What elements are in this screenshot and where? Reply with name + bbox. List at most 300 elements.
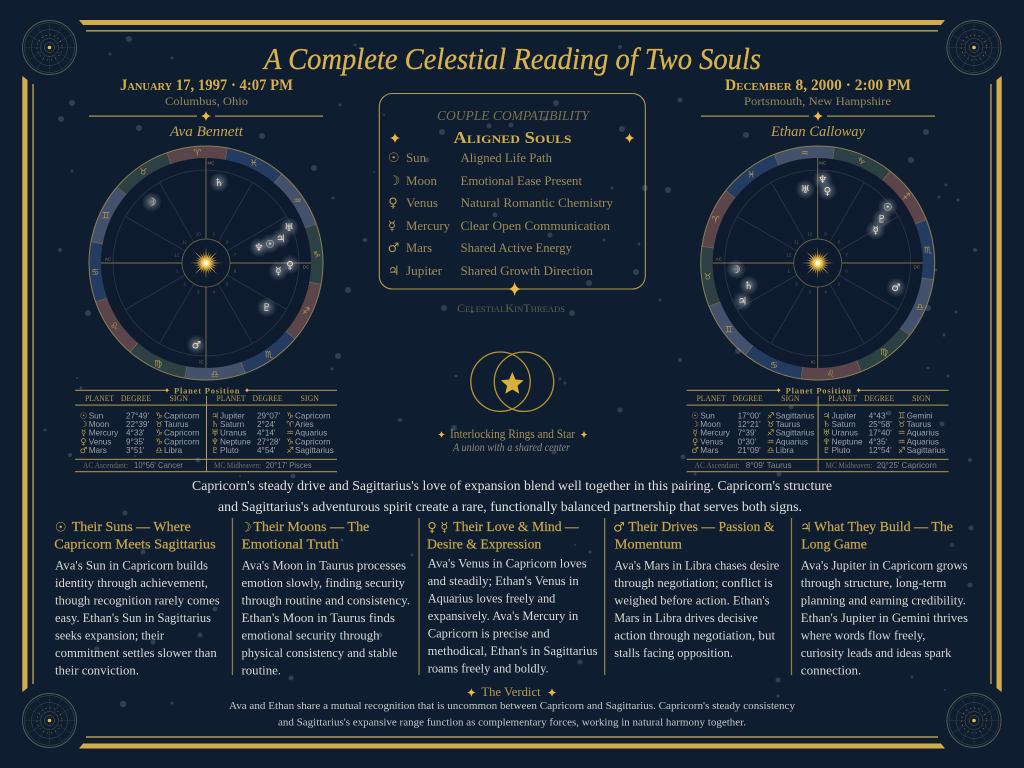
planet: Mars [886,277,906,297]
column: their suns: seeks expansion; their [55,628,165,642]
natal chart: Ava Bennett: ♌︎ [110,322,119,332]
compatibility rows: Moon [406,173,437,188]
column: their moons [240,520,410,677]
table: Ethan planet positions: Venus [700,437,723,446]
natal chart: Ava Bennett: ♋︎ [91,268,99,278]
column: love and mind: ☿ [440,520,448,536]
natal chart: Ethan Calloway: ♈︎ [712,215,721,225]
table: Ethan planet positions: SIGN [781,393,800,403]
natal chart: Ethan Calloway: IC [811,360,816,364]
column: their suns: though recognition rarely comes [55,593,220,607]
natal chart: Ethan Calloway: 4 [824,290,827,294]
table: Ethan planet positions: ♄ [823,420,830,430]
table: Ava planet positions: Capricorn [295,437,331,446]
rings caption [438,427,588,454]
column: what they build: where words flow freely, [801,628,925,642]
column: love and mind: Capricorn is precise and [428,626,550,640]
table: Ava planet positions: 4°54' [257,446,276,455]
verdict: The Verdict [481,685,541,699]
natal chart: Ava Bennett: 6 [234,268,237,273]
natal chart: Ethan Calloway: 12 [786,253,792,258]
table: Ethan planet positions: Mercury [700,429,731,438]
table: Ava planet positions: Neptune [220,437,251,446]
table: Ava planet positions [75,386,337,472]
table: Ethan planet positions: ☿ [692,429,698,439]
planet: Moon [726,259,746,279]
table: Ava planet positions: ♎︎ [155,446,163,456]
table: Ava planet positions: ♉︎ [155,420,163,430]
table: Ava planet positions: Aries [295,420,314,429]
column: their suns: easy. Ethan's Sun in Sagittarius [55,611,211,625]
natal chart: Ava Bennett: 2 [184,282,187,287]
planet: Saturn [209,172,229,192]
natal chart: Ethan Calloway: 6 [845,268,848,273]
table: Ethan planet positions: Gemini [907,411,933,420]
natal chart: Ethan Calloway: ♍︎ [880,348,888,358]
table: Ava planet positions: Capricorn [164,437,200,446]
natal chart: Ava Bennett: 3 [197,290,200,294]
column: their suns: their conviction. [55,663,139,677]
table: Ava planet positions: Jupiter [220,411,245,420]
table: Ava planet positions: AC Ascendant: [83,461,128,470]
table: Ethan planet positions: Uranus [832,429,858,438]
compatibility rows: Venus [406,195,438,210]
table: Ethan planet positions [687,386,949,472]
table: Ava planet positions: Sagittarius [295,446,334,455]
compatibility rows: Natural Romantic Chemistry [460,195,613,210]
table: Ava planet positions: 20°17' Pisces [266,460,312,470]
natal chart: Ethan Calloway: AC [716,256,723,262]
table: Ethan planet positions: ♐︎ [898,446,905,456]
table: Ethan planet positions: Taurus [776,420,800,429]
table: Ava planet positions: Planet Position [174,386,240,396]
column: love and mind: Desire & Expression [427,538,541,552]
planet: Mars [186,335,206,355]
table: Ethan planet positions: ♐︎ [767,429,774,439]
table: Ethan planet positions: Aquarius [776,437,808,446]
table: Ethan planet positions: ♇ [823,446,830,456]
table: Ethan planet positions: AC Ascendant: [695,461,740,470]
table: Ava planet positions: Saturn [220,420,245,429]
compatibility rows: ☽ [389,174,400,189]
table: Ava planet positions: ☿ [81,429,86,439]
table: Ava planet positions: Aquarius [295,429,327,438]
column: their suns: Their Suns — Where [72,520,191,535]
table: Ethan planet positions: SIGN [912,393,931,403]
column: their moons: emotion slowly, finding security [242,576,406,590]
natal chart: Ethan Calloway: ♐︎ [903,193,911,203]
column: love and mind: Ava's Venus in Capricorn loves [428,556,587,570]
column: their moons: Emotional Truth [242,538,339,552]
column: their moons: ☽ [240,520,252,536]
natal chart: Ethan Calloway: ♎︎ [916,303,924,313]
planet: Venus: ♀ [286,259,294,271]
planet: Uranus: ♅ [801,184,810,196]
natal chart: Ethan Calloway: 9 [824,232,827,236]
column: their suns [54,520,220,677]
natal chart: Ava Bennett: ♒︎ [293,196,302,206]
table: Ethan planet positions: ♀ [692,437,698,447]
compatibility rows [388,150,613,279]
table: Ava planet positions: Mercury [89,429,119,438]
planet: Saturn [739,275,759,295]
column: their suns: commitment settles slower than [55,646,217,660]
natal chart: Ethan Calloway: ♊︎ [725,326,733,336]
table: Ava planet positions: 29°07' [257,411,280,420]
natal chart: Ethan Calloway: 7 [845,253,848,258]
table: Ethan planet positions: ♒︎ [898,429,905,439]
table: Ethan planet positions: Aquarius [907,437,939,446]
column: their drives: ♂ [613,520,625,536]
column: love and mind: and steadily; Ethan's Venus in [428,574,579,588]
corner medallion: top left [22,20,76,74]
table: Ava planet positions: 22°39' [126,420,149,429]
table: Ava planet positions: SIGN [170,393,188,403]
table: Ava planet positions: ♑︎ [286,411,294,421]
planet: Jupiter [732,291,752,311]
table: Ava planet positions: DEGREE [121,393,151,403]
left person header: Columbus, Ohio [165,94,248,108]
natal chart: Ava Bennett: ♈︎ [193,149,202,159]
table: Ethan planet positions: ☽ [691,420,699,430]
rings caption: A union with a shared center [452,442,570,454]
left person header [89,77,323,140]
table: Ethan planet positions: Saturn [832,420,856,429]
table: Ava planet positions: ♄ [211,420,219,430]
planet: Moon: ☽ [147,197,156,209]
compatibility rows: ♃ [388,264,400,279]
column: their drives [613,520,780,660]
natal chart: Ava Bennett: DC [303,264,310,270]
natal chart: Ava Bennett: 7 [234,253,237,258]
planet: Pluto: ♇ [877,213,886,225]
table: Ava planet positions: Venus [89,437,111,446]
table: Ethan planet positions: Jupiter [832,411,856,420]
natal chart: Ethan Calloway: ♉︎ [703,272,712,282]
natal chart: Ethan Calloway: 8 [838,239,841,244]
table: Ethan planet positions: Aquarius [907,429,939,438]
table: Ava planet positions: DEGREE [252,393,282,403]
column: love and mind: expansively. Ava's Mercury in [428,609,579,623]
column: their suns: Capricorn Meets Sagittarius [54,538,216,552]
planet: Moon: ☽ [731,264,741,276]
column: their drives: weighed before action. Ethan's [614,593,770,607]
panel bottom star [509,282,521,296]
natal chart: Ava Bennett: 10 [196,232,201,236]
table: Ethan planet positions: ♉︎ [898,420,905,430]
planet: Jupiter: ♃ [738,296,747,308]
natal chart: Ethan Calloway: 11 [794,239,799,244]
icon: interlocking rings and star [471,352,554,411]
natal chart: Ethan Calloway [662,107,974,419]
planet: Neptune: ♆ [818,174,827,186]
planet: Pluto [872,209,892,229]
column: their moons: Ethan's Moon in Taurus finds [242,611,395,625]
table: Ethan planet positions: Mars [700,446,719,455]
natal chart: Ava Bennett: MC [208,160,215,166]
table: Ava planet positions: Capricorn [164,411,200,420]
natal chart: Ethan Calloway: ♑︎ [857,157,865,167]
compatibility rows: Mars [406,240,432,255]
column: what they build: Ethan's Jupiter in Gemini thrives [801,611,968,625]
natal chart: Ethan Calloway: 1 [787,268,790,273]
background stars [44,36,977,707]
table: Ava planet positions: ♑︎ [155,411,163,421]
column: what they build: through structure, long-term [801,576,947,590]
table: Ava planet positions: Taurus [164,420,189,429]
planet: Mercury: ☿ [872,225,879,237]
column: their moons: emotional security through [242,628,380,642]
column dividers [232,518,792,675]
table: Ava planet positions: 9°35' [126,437,145,446]
column: what they build: curiosity leads and ideas spark [801,646,952,660]
intro paragraph [192,478,832,514]
table: Ethan planet positions: 21°09' [738,446,761,455]
table: Ethan planet positions: Sun [700,411,715,420]
column: their moons: Their Moons — The [253,520,369,535]
column: their suns: Ava's Sun in Capricorn builds [55,558,208,572]
column: what they build: connection. [801,663,861,677]
natal chart: Ethan Calloway: 2 [795,282,798,287]
compatibility rows: ☉ [388,151,400,166]
table: Ethan planet positions: 17°00' [738,411,761,420]
natal chart: Ava Bennett: ♍︎ [154,359,162,369]
natal chart: Ethan Calloway: DC [913,264,921,270]
natal chart: Ethan Calloway: 5 [838,282,841,287]
table: Ethan planet positions: ♐︎ [767,411,774,421]
table: Ethan planet positions: 4°43' [869,411,888,420]
compatibility rows: Shared Active Energy [460,240,572,255]
table: Ava planet positions: ♑︎ [286,437,294,447]
table: Ava planet positions: Capricorn [295,411,331,420]
table: Ethan planet positions: ☉ [691,411,699,421]
planet: Pluto [257,297,277,317]
column: their drives: action through negotiation, but [614,628,776,642]
planet: Venus [280,255,300,275]
column: what they build [800,520,968,677]
table: Ethan planet positions: ♊︎ [898,411,905,421]
natal chart: Ava Bennett: IC [199,360,205,364]
compatibility rows: Shared Growth Direction [460,263,593,278]
table: Ava planet positions: 4°33' [126,429,145,438]
table: Ethan planet positions: 0°30' [738,437,757,446]
table: Ethan planet positions: ♉︎ [767,420,774,430]
natal chart: Ava Bennett: AC [105,256,112,262]
column: love and mind [427,520,598,675]
table: Ethan planet positions: ♎︎ [767,446,774,456]
table: Ethan planet positions: Sagittarius [907,446,945,455]
planet: Sun [260,234,280,254]
column: love and mind: Aquarius loves freely and [428,591,556,605]
table: Ethan planet positions: ♂ [691,446,699,456]
table: Ethan planet positions: ♒︎ [898,437,905,447]
table: Ava planet positions: Moon [89,420,110,429]
column: their moons: physical consistency and stable [242,646,398,660]
table: Ava planet positions: 27°49' [126,411,149,420]
table: Ava planet positions: ☉ [80,411,87,421]
planet: Saturn: ♄ [214,177,224,189]
table: Ethan planet positions: DEGREE [864,393,894,403]
planet: Jupiter [271,228,291,248]
column: what they build: ♃ [800,520,812,536]
rings caption: Interlocking Rings and Star [450,427,576,441]
natal chart: Ethan Calloway: 3 [809,290,812,294]
natal chart: Ava Bennett: 1 [176,268,179,273]
compatibility rows: Sun [406,150,426,165]
natal chart: Ava Bennett: 8 [226,239,229,244]
natal chart: Ava Bennett [50,107,362,419]
planet: Jupiter: ♃ [276,233,285,245]
table: Ethan planet positions: Moon [700,420,721,429]
table: Ethan planet positions: 25°58' [869,420,892,429]
table: Ava planet positions: PLANET [216,393,246,403]
table: Ethan planet positions: PLANET [697,393,726,403]
result heading: Aligned Souls [454,128,572,147]
natal chart: Ava Bennett: 5 [226,282,229,287]
table: Ava planet positions: 4°14' [257,429,276,438]
table: Ethan planet positions: Planet Position [786,386,851,396]
column: love and mind: ♀ [427,520,437,536]
natal chart: Ava Bennett: 12 [174,253,180,258]
table: Ava planet positions: ♐︎ [286,446,294,456]
column: their suns: identity through achievement, [55,576,208,590]
planet: Uranus: ♅ [284,222,294,234]
table: Ava planet positions: MC Midheaven: [214,461,261,470]
table: Ethan planet positions: 7°39' [738,429,757,438]
planet: Venus: ♀ [823,185,831,197]
column: what they build: Long Game [801,538,867,552]
table: Ethan planet positions: 12°54' [869,446,892,455]
natal chart: Ava Bennett: ♊︎ [102,211,110,221]
right person header: December 8, 2000 · 2:00 PM [725,77,911,94]
table: Ethan planet positions: 17°40' [869,429,892,438]
natal chart: Ava Bennett: ♑︎ [313,250,321,260]
table: Ava planet positions: ♀ [80,437,87,447]
left person header: Ava Bennett [169,124,244,140]
natal chart: Ava Bennett: ♎︎ [211,370,219,380]
column: their drives: Ava's Mars in Libra chases desire [614,558,780,572]
brand text: CelestialKinThreads [457,303,565,315]
table: Ava planet positions: Sun [89,411,104,420]
table: Ethan planet positions: ♒︎ [767,437,774,447]
table: Ethan planet positions: Libra [776,446,794,455]
table: Ava planet positions: ♒︎ [286,429,294,439]
table: Ethan planet positions: ♃ [823,411,830,421]
verdict: Ava and Ethan share a mutual recognition that is uncommon between Capricorn and Sagittarius. Capricorn's steady consistency [229,700,795,712]
table: Ethan planet positions: 8°09' Taurus [746,460,792,470]
natal chart: Ethan Calloway: ♌︎ [827,369,835,379]
natal chart: Ava Bennett: 9 [213,232,216,236]
table: Ava planet positions: ♇ [211,446,219,456]
table: Ethan planet positions: Pluto [832,446,851,455]
planet: Mercury: ☿ [275,266,282,278]
natal chart: Ethan Calloway: ♓︎ [747,170,755,180]
table: Ethan planet positions: Neptune [832,437,863,446]
right person header: Portsmouth, New Hampshire [744,94,891,108]
panel heading: COUPLE COMPATIBILITY [437,109,591,124]
table: Ava planet positions: ♆ [211,437,219,447]
natal chart: Ava Bennett: ♏︎ [265,351,273,361]
left person header: January 17, 1997 · 4:07 PM [120,77,293,94]
compatibility rows: Aligned Life Path [460,150,552,165]
table: Ava planet positions: SIGN [300,393,319,403]
table: Ava planet positions: ☽ [80,420,87,430]
intro paragraph: and Sagittarius's adventurous spirit create a rare, functionally balanced partnership that serves both signs. [218,499,802,514]
table: Ava planet positions: Uranus [220,429,246,438]
compatibility rows: Clear Open Communication [460,218,610,233]
table: Ethan planet positions: 12°21' [738,420,761,429]
table: Ava planet positions: 27°28' [257,437,280,446]
table: Ava planet positions: ♑︎ [155,437,163,447]
column: their drives: Their Drives — Passion & [628,520,774,535]
table: Ethan planet positions: Taurus [907,420,931,429]
column: their moons: through routine and consistency. [242,593,410,607]
column: their suns: ☉ [55,520,67,536]
planet: Mercury [268,261,288,281]
planet: Neptune [249,237,269,257]
natal chart: Ava Bennett: 11 [182,239,188,244]
table: Ethan planet positions: Sagittarius [776,429,814,438]
table: Ethan planet positions: PLANET [828,393,858,403]
column: what they build: What They Build — The [814,520,953,535]
verdict: and Sagittarius's expansive range function as complementary forces, working in natural harmony together. [278,717,746,729]
planet: Mercury [866,220,886,240]
planet: Neptune: ♆ [254,242,264,254]
table: Ava planet positions: 3°51' [126,446,145,455]
table: Ethan planet positions: 4°35' [869,437,888,446]
table: Ava planet positions: Libra [164,446,183,455]
verdict [229,685,795,729]
table: Ava planet positions: 2°24' [257,420,276,429]
planet: Uranus [795,179,815,199]
corner medallion: top right [947,20,1001,74]
table: Ethan planet positions: ♆ [823,437,830,447]
planet: Pluto: ♇ [262,302,271,314]
table: Ava planet positions: ♑︎ [155,429,163,439]
corner medallion: bottom left [22,694,76,748]
column: their moons: Ava's Moon in Taurus processes [242,558,406,572]
column: love and mind: Their Love & Mind — [453,520,580,535]
column: their moons: routine. [242,663,281,677]
table: Ava planet positions: ♂ [80,446,88,456]
natal chart: Ava Bennett: ♐︎ [302,307,310,317]
planet: Moon [142,192,162,212]
natal chart: Ethan Calloway: ♒︎ [801,149,809,159]
column: their drives: Momentum [615,538,682,552]
compatibility rows: Jupiter [406,263,443,278]
column: their drives: stalls facing opposition. [614,646,733,660]
natal chart: Ethan Calloway: MC [819,160,827,166]
intro paragraph: Capricorn's steady drive and Sagittarius's love of expansion blend well together in this pairing. Capricorn's structure [192,478,832,493]
panel: couple compatibility [379,94,645,296]
right person header: Ethan Calloway [770,124,866,140]
column: their drives: Mars in Libra drives decisive [614,611,758,625]
result heading [390,128,634,147]
table: Ava planet positions: ♅ [211,429,219,439]
table: Ava planet positions: Mars [89,446,107,455]
compatibility rows: ♀ [388,196,398,211]
table: Ethan planet positions: ♅ [823,429,830,439]
table: Ava planet positions: Capricorn [164,429,200,438]
planet: Sun: ☉ [883,202,892,214]
natal chart: Ethan Calloway: ♏︎ [924,246,932,256]
compatibility rows: ♂ [388,241,399,256]
table: Ava planet positions: Pluto [220,446,239,455]
planet: Neptune [813,169,833,189]
table: Ethan planet positions: MC Midheaven: [826,461,873,470]
table: Ethan planet positions: DEGREE [733,393,763,403]
natal chart: Ethan Calloway: 10 [807,232,813,236]
